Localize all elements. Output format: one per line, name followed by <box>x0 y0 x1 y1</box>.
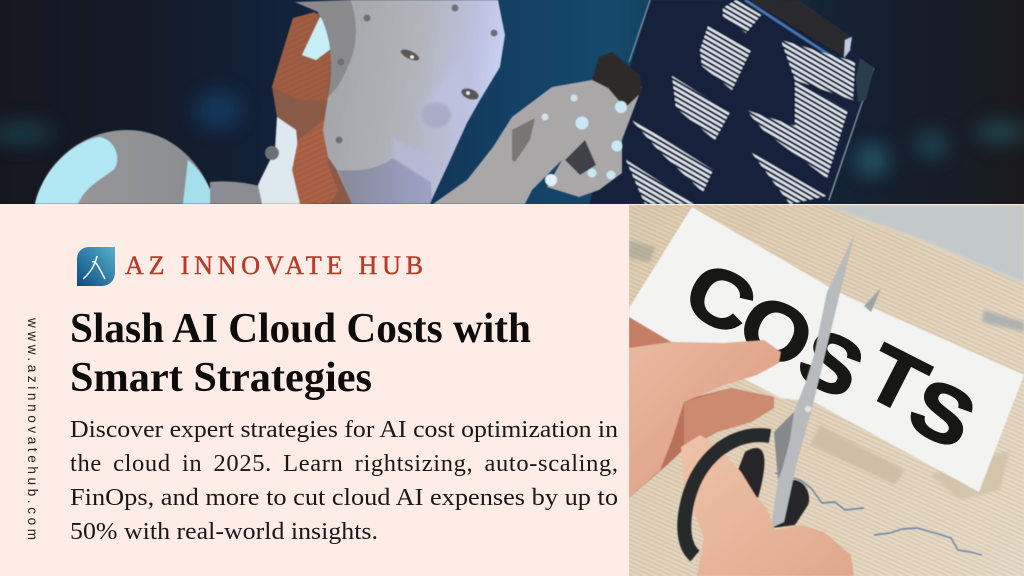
right image divider <box>624 205 629 576</box>
logo <box>77 247 423 286</box>
description text: FinOps, and more to cut cloud AI expenses by up to <box>70 484 618 511</box>
word COSTS: C <box>671 244 770 353</box>
stock chart lines <box>775 473 982 555</box>
logo icon <box>77 247 115 286</box>
word COSTS: T <box>851 327 941 432</box>
description text <box>70 416 618 545</box>
newspaper background <box>629 205 1024 576</box>
description text: Discover expert strategies for AI cost optimization in <box>70 416 618 443</box>
title: Slash AI Cloud Costs with <box>70 306 531 352</box>
title: Smart Strategies <box>70 355 372 401</box>
word COSTS: S <box>785 310 878 416</box>
website url vertical: www.azinnovatehub.com <box>25 317 40 540</box>
scissors <box>771 233 881 528</box>
robot head <box>258 0 505 204</box>
brand name: AZ INNOVATE HUB <box>125 251 423 280</box>
image: hand cutting the word COSTS with scissors <box>629 205 1024 576</box>
word COSTS: O <box>725 275 828 387</box>
word COSTS <box>690 268 972 444</box>
title <box>70 306 531 401</box>
word COSTS: S <box>896 360 989 467</box>
image: AI robot reading code on a transparent screen <box>0 0 1024 204</box>
shoulder <box>35 130 315 204</box>
paper strip <box>629 207 1024 492</box>
right hand gripping scissors <box>681 435 854 576</box>
transparent code screen <box>589 0 874 204</box>
robot hand <box>433 52 642 204</box>
description text: the cloud in 2025. Learn rightsizing, auto-scaling, <box>70 450 618 477</box>
left hand holding paper <box>629 317 781 498</box>
description text: 50% with real-world insights. <box>70 518 378 545</box>
